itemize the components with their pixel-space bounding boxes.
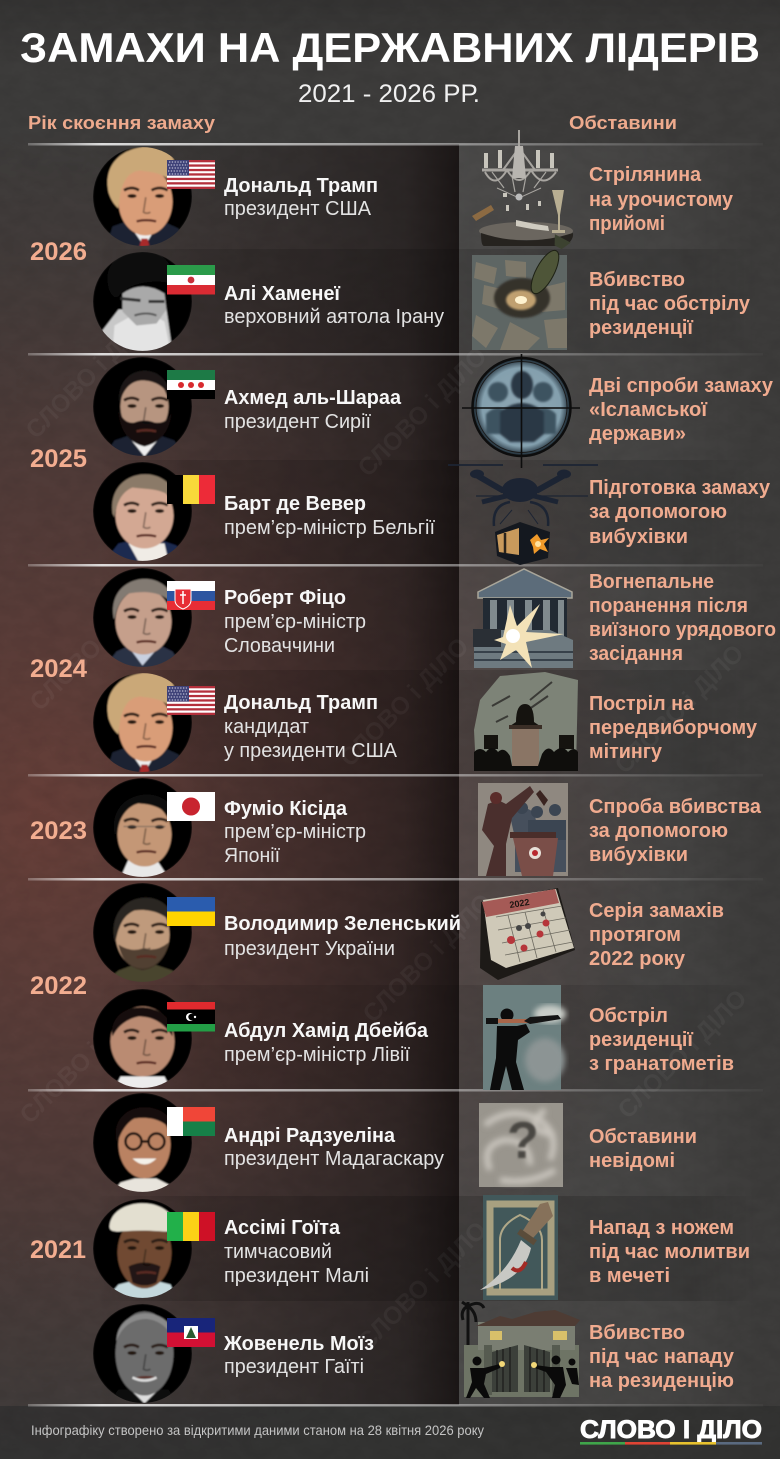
circumstance: держави»: [589, 423, 686, 445]
panel: Fumio Kishida: [93, 778, 762, 878]
circumstance: Вогнепальне: [589, 571, 714, 593]
name: Абдул Хамід Дбейба: [224, 1020, 429, 1042]
panel: Donald Trump 2026: [93, 130, 734, 246]
role: прем’єр-міністр: [224, 611, 366, 633]
circumstance: [589, 1322, 735, 1392]
column heading: year: Рік скоєння замаху: [28, 113, 215, 133]
year 2026: 2026: [30, 238, 87, 266]
flag: Madagascar: [167, 1107, 215, 1136]
circumstance: Підготовка замаху: [589, 477, 771, 499]
portrait: [93, 252, 192, 352]
portrait: [93, 568, 192, 668]
flag: USA: [167, 160, 215, 189]
portrait: [93, 1199, 192, 1298]
role: прем’єр-міністр: [224, 821, 366, 843]
panel: Robert Fico: [93, 568, 776, 668]
flag: Belgium: [167, 475, 215, 504]
panel: Ahmed al-Sharaa: [93, 354, 774, 468]
circumstance: «Ісламської: [589, 399, 707, 421]
role: верховний аятола Ірану: [224, 306, 444, 328]
icon: rally speaker: [474, 672, 578, 771]
icon: calendar 2022: 2022: [509, 897, 530, 910]
name: Барт де Вевер: [224, 493, 366, 515]
icon: drone with explosive: [448, 465, 598, 565]
role: Словаччини: [224, 635, 335, 657]
icon: dagger on prayer rug: [480, 1195, 558, 1300]
role: президент США: [224, 198, 372, 220]
flag: Syria: [167, 370, 215, 399]
icon: chandelier and table: [472, 130, 573, 246]
circumstance: [589, 269, 751, 339]
flag: Ukraine: [167, 897, 215, 926]
portrait: [93, 1093, 192, 1192]
role: [224, 821, 366, 867]
role: Японії: [224, 845, 280, 867]
role: прем’єр-міністр Бельгії: [224, 517, 435, 539]
portrait: [93, 1304, 192, 1404]
icon: attack on villa: [462, 1302, 580, 1398]
background: СЛОВО і ДІЛО: [357, 888, 497, 1028]
circumstance: 2022 року: [589, 948, 686, 970]
background: СЛОВО і ДІЛО: [612, 984, 752, 1124]
flag: Japan: [167, 792, 215, 821]
circumstance: під час обстрілу: [589, 293, 751, 315]
circumstance: [589, 796, 762, 866]
icon: sniper scope: [462, 354, 580, 468]
circumstance: на резиденцію: [589, 1370, 734, 1392]
flag: USA: [167, 686, 215, 715]
icon: calendar 2022: [480, 888, 575, 980]
circumstance: Обставини: [589, 1126, 697, 1148]
icon: attacker throwing explosive: [478, 783, 568, 876]
circumstance: за допомогою: [589, 501, 727, 523]
icon: unknown swirl: [479, 1103, 563, 1187]
circumstance: Напад з ножем: [589, 1217, 734, 1239]
name: Роберт Фіцо: [224, 587, 346, 609]
circumstance: [589, 571, 776, 665]
role: президент Гаїті: [224, 1356, 364, 1378]
circumstance: прийомі: [589, 213, 665, 235]
circumstance: виїзного урядового: [589, 619, 776, 641]
role: президент Мадагаскару: [224, 1148, 444, 1170]
icon: government building and flash: [473, 569, 573, 668]
column heading: circumstances: Обставини: [569, 113, 677, 133]
name: Фуміо Кісіда: [224, 798, 348, 820]
circumstance: з гранатометів: [589, 1053, 734, 1075]
flag: Mali: [167, 1212, 215, 1241]
role: прем’єр-міністр Лівії: [224, 1044, 410, 1066]
panel: Andry Rajoelina: [93, 1093, 697, 1192]
circumstance: [589, 375, 774, 445]
panel: Donald Trump 2024: [93, 672, 758, 772]
circumstance: в мечеті: [589, 1265, 670, 1287]
role: тимчасовий: [224, 1241, 332, 1263]
background: СЛОВО і ДІЛО: [14, 989, 154, 1129]
portrait: [93, 989, 192, 1088]
circumstance: мітингу: [589, 741, 663, 763]
role: у президенти США: [224, 740, 398, 762]
flag: Slovakia: [167, 581, 215, 610]
year 2022: 2022: [30, 972, 87, 1000]
portrait: [93, 883, 192, 982]
panel: Abdul Hamid Dbeibah: [93, 985, 734, 1090]
circumstance: [589, 1217, 750, 1287]
panel: Jovenel Moise: [93, 1302, 735, 1404]
role: кандидат: [224, 716, 309, 738]
panel: Bart De Wever: [93, 462, 771, 565]
circumstance: Спроба вбивства: [589, 796, 762, 818]
circumstance: [589, 1005, 734, 1075]
background: СЛОВО і ДІЛО: [24, 576, 164, 716]
name: Ассімі Гоїта: [224, 1217, 341, 1239]
circumstance: засідання: [589, 643, 683, 665]
circumstance: [589, 477, 771, 548]
role: [224, 1241, 369, 1287]
name: Жовенель Моїз: [223, 1333, 374, 1355]
background: СЛОВО і ДІЛО: [20, 304, 160, 444]
panel: Volodymyr Zelensky: [93, 883, 724, 982]
portrait: [93, 672, 192, 772]
circumstance: за допомогою: [589, 820, 728, 842]
background: СЛОВО і ДІЛО: [352, 1216, 492, 1356]
year 2021: 2021: [30, 1236, 86, 1264]
flag: Iran: [167, 265, 215, 294]
circumstance: [589, 1126, 697, 1172]
portrait: [93, 357, 192, 456]
circumstance: резиденції: [589, 1029, 693, 1051]
role: [224, 611, 366, 657]
role: президент Сирії: [224, 411, 371, 433]
circumstance: Вбивство: [589, 269, 685, 291]
panel: Assimi Goita: [93, 1195, 750, 1300]
circumstance: на урочистому: [589, 189, 734, 211]
role: президент Малі: [224, 1265, 369, 1287]
portrait: [93, 146, 192, 246]
portrait: [93, 778, 192, 878]
name: Андрі Радзуеліна: [224, 1125, 396, 1147]
title: ЗАМАХИ НА ДЕРЖАВНИХ ЛІДЕРІВ: [20, 24, 760, 71]
logo: СЛОВО І ДІЛО: [580, 1416, 762, 1444]
name: Алі Хаменеї: [224, 283, 340, 305]
circumstance: невідомі: [589, 1150, 675, 1172]
year 2025: 2025: [30, 445, 87, 473]
name: Дональд Трамп: [224, 175, 378, 197]
circumstance: Стрілянина: [589, 164, 702, 186]
circumstance: [589, 693, 758, 763]
name: Ахмед аль-Шараа: [224, 387, 402, 409]
flag: Libya: [167, 1002, 215, 1032]
role: [224, 716, 398, 762]
circumstance: резиденції: [589, 317, 693, 339]
circumstance: передвиборчому: [589, 717, 758, 739]
circumstance: [589, 164, 734, 235]
background: СЛОВО і ДІЛО: [609, 639, 749, 779]
circumstance: Обстріл: [589, 1005, 668, 1027]
circumstance: Постріл на: [589, 693, 695, 715]
circumstance: вибухівки: [589, 526, 688, 548]
flag: Haiti: [167, 1318, 215, 1347]
icon: soldier with RPG: [483, 985, 566, 1090]
icon: unknown swirl: ?: [507, 1112, 539, 1170]
circumstance: Дві спроби замаху: [589, 375, 774, 397]
circumstance: протягом: [589, 924, 681, 946]
circumstance: вибухівки: [589, 844, 688, 866]
name: Дональд Трамп: [224, 692, 378, 714]
year 2023: 2023: [30, 817, 87, 845]
icon: bombed city: [472, 234, 571, 350]
circumstance: Вбивство: [589, 1322, 685, 1344]
name: Володимир Зеленський: [224, 913, 461, 935]
background: СЛОВО і ДІЛО: [352, 342, 492, 482]
background: СЛОВО і ДІЛО: [334, 632, 474, 772]
subtitle: 2021 - 2026 РР.: [298, 80, 480, 108]
circumstance: Серія замахів: [589, 900, 724, 922]
portrait: [93, 462, 192, 562]
role: президент України: [224, 938, 395, 960]
footer note: Інфографіку створено за відкритими даними станом на 28 квітня 2026 року: [31, 1422, 484, 1438]
year 2024: 2024: [30, 655, 87, 683]
circumstance: поранення після: [589, 595, 748, 617]
circumstance: [589, 900, 724, 970]
circumstance: під час нападу: [589, 1346, 735, 1368]
panel: Ali Khamenei: [93, 234, 751, 352]
circumstance: під час молитви: [589, 1241, 750, 1263]
